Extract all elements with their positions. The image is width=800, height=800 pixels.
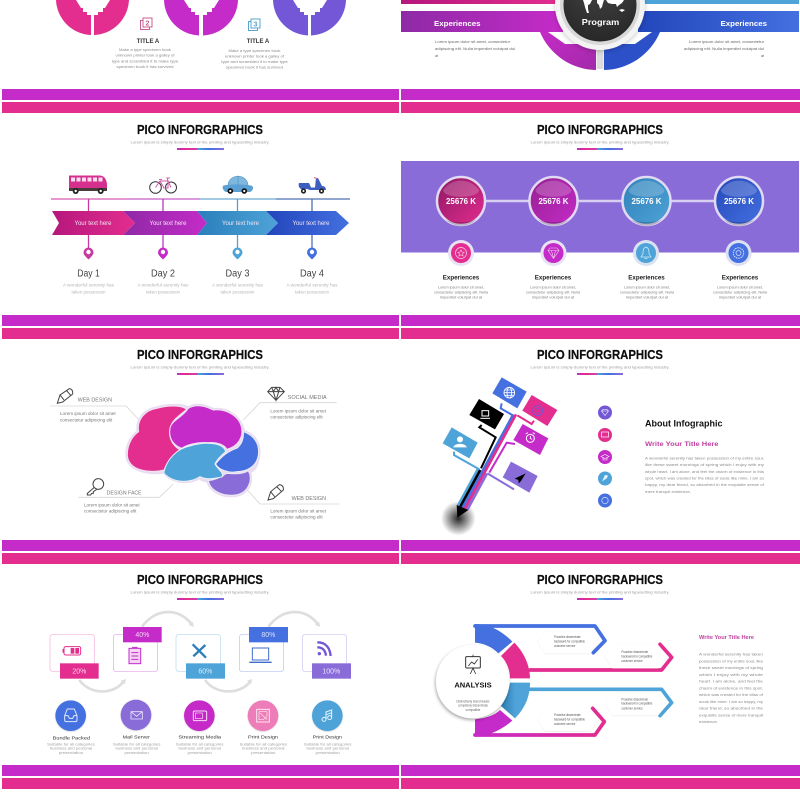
centre strip (596, 48, 604, 69)
arrow pink (530, 644, 672, 670)
day labels: Day 2 (151, 268, 175, 280)
step 1: 20% (72, 668, 86, 675)
analysis paragraph: which I enjoy with my whole (699, 672, 764, 677)
analysis paragraph: souls like mine. I am so happy, my (699, 699, 763, 704)
analysis paragraph (699, 652, 764, 724)
footer bars row 3 (2, 540, 800, 564)
service music: Print Design (313, 735, 342, 741)
day labels: Day 3 (226, 268, 250, 280)
experiences descriptions: imperdiet volutpat dui at (440, 296, 482, 300)
left arc (540, 32, 596, 70)
icon: key (87, 479, 104, 495)
hexagon 4: customer service (554, 722, 575, 726)
title A column 2: type and scrambled it to make type (112, 60, 178, 64)
title: PICO INFORGRAPHICS (537, 348, 663, 362)
right text: Lorem ipsum dolor sit amet, consectetur (689, 40, 765, 44)
day captions: taken possession (72, 290, 106, 294)
lorem blocks: consectetur adipiscing elit (270, 515, 324, 520)
subtitle: Lorem Ipsum is simply dummy text of the printing and typesetting industry. (530, 590, 670, 594)
chevron labels: Your text here (292, 221, 330, 227)
panel: experience counters (401, 123, 799, 300)
panel: title A donuts (56, 0, 346, 70)
lobe magenta (170, 406, 242, 449)
title A column 2: specimen book it has survived (116, 65, 174, 69)
leader lines (50, 403, 339, 504)
analysis paragraph: charm of existence in this spot, (699, 685, 763, 690)
title A column 3: Make a type specimen book (228, 49, 281, 53)
write title: Write Your Title Here (645, 441, 719, 448)
right experiences band (638, 11, 799, 32)
divider (577, 373, 623, 375)
chevron labels: Your text here (150, 221, 187, 227)
panel: progress flow (47, 573, 352, 755)
panel: about infographic (441, 348, 765, 536)
icon: pencil top left (57, 389, 73, 403)
experiences descriptions: consectetur adipiscing elit. Nulla (526, 290, 581, 294)
left text: Lorem ipsum dolor sit amet, consectetur (435, 40, 511, 44)
step 3 (176, 634, 225, 679)
service captions: presentation (124, 751, 149, 755)
hexagon 4: Proactive disseminate (554, 713, 581, 717)
icon dots (598, 406, 612, 508)
card paper plane (503, 462, 538, 493)
lorem blocks: consectetur adipiscing elit (84, 509, 137, 514)
tip shadow (441, 501, 476, 536)
service captions: Suitable for all categories (239, 742, 287, 746)
experiences descriptions: imperdiet volutpat dui at (719, 296, 761, 300)
experiences descriptions: Lorem ipsum dolor sit amet, (438, 286, 484, 290)
counter 1 (437, 177, 485, 226)
left text (435, 40, 515, 58)
label web design: WEB DESIGN (78, 398, 112, 404)
experiences descriptions: Lorem ipsum dolor sit amet, (624, 286, 670, 290)
hexagon 1: customer service (554, 644, 575, 648)
experiences labels: Experiences (628, 274, 665, 282)
day captions (63, 282, 338, 294)
about paragraph: mere tranquil existence, (645, 489, 691, 494)
analysis paragraph: existence, (699, 719, 718, 724)
day labels (77, 268, 324, 280)
step 2: 40% (135, 632, 149, 639)
title A column 2 (112, 38, 178, 69)
analysis paragraph: A wonderful serenity has taken (699, 652, 763, 656)
counter 2: 25676 K (538, 197, 569, 206)
service streaming (178, 700, 221, 741)
segment magenta (475, 710, 512, 737)
service captions (47, 742, 352, 755)
lorem blocks: consectetur adipiscing elit (60, 417, 113, 422)
label web design 2: WEB DESIGN (292, 496, 326, 502)
step 5 (302, 634, 351, 679)
lobe pink (127, 406, 187, 471)
title: PICO INFORGRAPHICS (137, 123, 263, 137)
analysis paragraph: possession of my entire soul, like (699, 658, 764, 663)
divider (577, 598, 623, 600)
service captions: presentation (315, 751, 340, 755)
chevron labels: Your text here (74, 221, 112, 227)
analysis paragraph: exquisite sense of mere tranquil (699, 712, 763, 717)
icon: car (223, 176, 253, 194)
analysis paragraph: heart. I am alone, and feel the (699, 678, 764, 684)
step 4: 80% (261, 632, 275, 639)
experiences labels: Experiences (722, 274, 759, 282)
subtitle: Lorem Ipsum is simply dummy text of the printing and typesetting industry. (530, 140, 670, 144)
hexagon 3 (605, 693, 668, 715)
footer bars row 4 (2, 765, 800, 789)
icon: pencil bottom right (268, 485, 283, 500)
service captions: business and personal (178, 747, 221, 751)
about paragraph: whole heart. I am alone, and feel the charm of existence in this (645, 469, 764, 474)
service mail: Mail Server (123, 734, 150, 740)
arrow blue (475, 626, 605, 653)
subtitle: Lorem Ipsum is simply dummy text of the printing and typesetting industry. (130, 364, 270, 370)
segment sky (501, 683, 530, 718)
grey inner ring (560, 0, 640, 45)
subtitle: Lorem Ipsum is simply dummy text of the printing and typesetting industry. (530, 364, 670, 370)
arrow magenta (475, 708, 604, 735)
icon: number 2 (140, 18, 152, 30)
service captions: business and personal (115, 747, 158, 751)
counter 2 (530, 177, 578, 226)
analysis text: Distinctively brand leader (456, 699, 490, 703)
lorem blocks: Lorem ipsum dolor sit amet (84, 502, 141, 507)
hexagon 4 (538, 708, 598, 731)
left text: at (435, 54, 439, 58)
service bundle (53, 700, 90, 741)
title: PICO INFORGRAPHICS (137, 348, 263, 362)
day captions: A wonderful serenity has (138, 282, 189, 288)
icon: tools (193, 644, 206, 658)
icon: diamond (268, 387, 284, 400)
lobe lavender (208, 471, 250, 495)
service print: Print Design (248, 735, 278, 741)
analysis diagram (436, 624, 672, 737)
day captions: A wonderful serenity has (212, 282, 264, 288)
program label: Program (582, 17, 620, 27)
day captions: A wonderful serenity has (63, 282, 115, 288)
stems (88, 199, 312, 252)
about heading: About Infographic (645, 418, 722, 428)
subtitle: Lorem Ipsum is simply dummy text of the printing and typesetting industry. (130, 590, 270, 594)
hexagon 2: Proactive disseminate (621, 650, 648, 654)
step 3: 60% (198, 668, 212, 675)
service streaming: Streaming Media (178, 735, 221, 741)
lorem blocks: consectetur adipiscing elit (270, 415, 324, 420)
service captions: business and personal (306, 747, 349, 751)
icon: gear badge (726, 240, 752, 266)
title: PICO INFORGRAPHICS (137, 573, 263, 587)
card person (443, 427, 478, 458)
violet band (401, 161, 799, 252)
experiences labels (443, 274, 759, 282)
experiences descriptions: Lorem ipsum dolor sit amet, (717, 286, 763, 290)
icon: diamond badge (540, 240, 566, 266)
title A column 2: unknown printer took a galley of (116, 54, 176, 58)
icon: star badge (448, 240, 474, 266)
card clock (513, 424, 548, 455)
left text: adipiscing elit. Nulla imperdiet volutpat dui (435, 47, 515, 51)
experiences descriptions: consectetur adipiscing elit. Nulla (434, 290, 489, 294)
donut purple (164, 0, 238, 36)
experiences descriptions: consectetur adipiscing elit. Nulla (620, 290, 675, 294)
icon: rss (317, 642, 331, 656)
service captions: presentation (187, 751, 212, 755)
branches (454, 403, 534, 489)
experiences labels: Experiences (535, 274, 572, 282)
service captions: Suitable for all categories (304, 742, 352, 746)
hexagon 2: customer service (621, 659, 643, 663)
label social media: SOCIAL MEDIA (288, 395, 327, 401)
counter 3: 25676 K (632, 197, 662, 206)
step 4 (239, 627, 288, 672)
left experiences band (401, 11, 563, 32)
right text (684, 40, 765, 58)
divider (177, 148, 224, 150)
service captions: Suitable for all categories (113, 742, 161, 746)
about paragraph: like these sweet mornings of spring which I enjoy with my (645, 462, 764, 467)
top ribbon left (401, 0, 561, 4)
pencil tip (457, 505, 468, 518)
centre circle (436, 645, 509, 718)
analysis text: compatible (466, 708, 480, 712)
chevron 1 (52, 211, 135, 235)
flow diagram (47, 612, 352, 755)
write title: Write Your Title Here (699, 635, 754, 641)
hexagon 3: backward-for compatible (621, 702, 652, 706)
title A column 2: TITLE A (137, 38, 160, 45)
experiences right: Experiences (720, 19, 767, 28)
title A column 3 (221, 38, 288, 70)
experiences descriptions: imperdiet volutpat dui at (532, 296, 574, 300)
service print (248, 700, 278, 741)
icon: battery (63, 647, 81, 655)
footer bars row 2 (2, 315, 800, 339)
service captions: business and personal (50, 747, 92, 751)
service mail (121, 700, 151, 740)
experiences descriptions (434, 286, 768, 300)
brain halo (127, 406, 259, 495)
pencil stripes (458, 414, 516, 510)
hexagon 1 (538, 632, 598, 653)
title: PICO INFORGRAPHICS (537, 123, 663, 137)
experiences descriptions: Lorem ipsum dolor sit amet, (530, 286, 576, 290)
experiences labels: Experiences (443, 274, 480, 282)
chevron 3 (197, 211, 278, 235)
card globe (492, 377, 527, 408)
footer bars row 1 (2, 89, 800, 113)
lorem blocks: Lorem ipsum dolor sit amet (270, 408, 327, 413)
donut pink (56, 0, 129, 35)
arrow sky (530, 689, 672, 716)
label design face: DESIGN FACE (107, 490, 142, 496)
title A column 3: TITLE A (247, 38, 270, 45)
icon: bicycle (150, 178, 176, 193)
chevron 4 (266, 211, 349, 235)
icon: world map (583, 0, 625, 13)
curved arrows (79, 612, 318, 691)
experiences descriptions: imperdiet volutpat dui at (626, 296, 668, 300)
subtitle: Lorem Ipsum is simply dummy text of the printing and typesetting industry. (130, 140, 270, 144)
day captions: taken possession (146, 290, 181, 294)
step 1 (50, 634, 99, 679)
pencil tree (441, 377, 557, 536)
title A column 3: type and scrambled it to make type (221, 60, 288, 64)
divider (177, 598, 224, 600)
hexagon 2 (605, 645, 668, 668)
day captions: A wonderful serenity has (286, 282, 338, 288)
icon: presentation board (466, 655, 480, 674)
analysis paragraph: which was created for the bliss of (699, 692, 764, 697)
pin markers (84, 248, 317, 260)
icon: number 3: 3 (254, 22, 258, 29)
right arc (604, 32, 660, 70)
hexagon 4: backward-for compatible (554, 717, 585, 721)
panel: analysis (436, 573, 764, 737)
lobe sky (164, 443, 226, 481)
chevron labels (74, 221, 330, 227)
analysis text: completely disseminate (458, 704, 488, 708)
hexagon 2: backward-for compatible (621, 654, 652, 658)
service captions: business and personal (242, 747, 285, 751)
top ribbon right (640, 0, 799, 4)
step 2 (113, 627, 162, 672)
hexagon 1: Proactive disseminate (554, 635, 581, 639)
right text: adipiscing elit. Nulla imperdiet volutpat dui (684, 47, 764, 51)
divider (177, 373, 224, 375)
lobe blue (216, 432, 259, 472)
icon: bus (69, 176, 107, 194)
service captions: Suitable for all categories (176, 742, 224, 746)
about paragraph (645, 456, 765, 494)
chevron 2 (123, 211, 207, 235)
service music (312, 700, 343, 741)
icon: scooter (299, 178, 326, 194)
analysis paragraph: dear friend, so absorbed in the (699, 706, 764, 710)
panel: program diagram (401, 0, 799, 70)
experiences descriptions: consectetur adipiscing elit. Nulla (713, 290, 768, 294)
service captions: presentation (251, 751, 275, 755)
counter 4: 25676 K (724, 197, 754, 206)
donut violet (273, 0, 346, 36)
about paragraph: happy, my dear friend, so absorbed in the exquisite sense of (645, 482, 765, 487)
panel: brain diagram (50, 348, 339, 520)
brain illustration (50, 387, 339, 520)
icon: number 2: 2 (146, 21, 150, 28)
right text: at (761, 54, 765, 58)
title A column 3: specimen book it has survived (226, 66, 283, 70)
icon: clipboard (129, 647, 141, 664)
day captions: taken possession (295, 290, 330, 294)
day labels: Day 4 (300, 268, 324, 280)
white ring (555, 0, 645, 50)
step 5: 100% (322, 668, 340, 675)
lorem blocks: Lorem ipsum dolor sit amet (270, 508, 327, 513)
about paragraph: A wonderful serenity has taken possession of my entire soul, (645, 456, 764, 460)
lorem blocks (60, 408, 327, 520)
segment pink (501, 643, 530, 678)
counter 1: 25676 K (446, 197, 476, 206)
icon: number 3 (248, 19, 260, 30)
dark globe (564, 0, 636, 42)
title A column 3: unknown printer took a galley of (225, 54, 285, 58)
card monitor (469, 399, 504, 429)
arrow heads (121, 622, 320, 684)
about paragraph: spot, which was created for the bliss of souls like mine. I am so (645, 476, 765, 480)
chevron labels: Your text here (222, 221, 260, 227)
hexagon 3: customer service (621, 706, 643, 710)
card target (522, 395, 557, 426)
analysis label: ANALYSIS (454, 683, 492, 690)
segment blue (475, 624, 512, 653)
analysis text (456, 699, 490, 712)
day labels: Day 1 (77, 268, 100, 280)
panel: day timeline (51, 123, 350, 294)
counter 4 (715, 177, 763, 226)
analysis paragraph: these sweet mornings of spring (699, 665, 763, 670)
connector (461, 200, 738, 202)
title: PICO INFORGRAPHICS (537, 573, 663, 587)
service captions: presentation (59, 751, 83, 755)
title A column 2: Make a type specimen book (119, 48, 171, 52)
service bundle: Bundle Packed (53, 735, 90, 741)
icon: laptop (249, 648, 272, 662)
hexagon 1: backward-for compatible (554, 639, 585, 643)
service captions: Suitable for all categories (47, 742, 95, 746)
hexagon 3: Proactive disseminate (621, 697, 648, 701)
timeline rail (51, 198, 350, 200)
lorem blocks: Lorem ipsum dolor sit amet (60, 411, 117, 416)
icon: bell badge (633, 240, 659, 266)
divider (577, 148, 623, 150)
day captions: taken possession (220, 290, 255, 294)
counter 3 (622, 177, 670, 226)
experiences left: Experiences (434, 19, 480, 28)
